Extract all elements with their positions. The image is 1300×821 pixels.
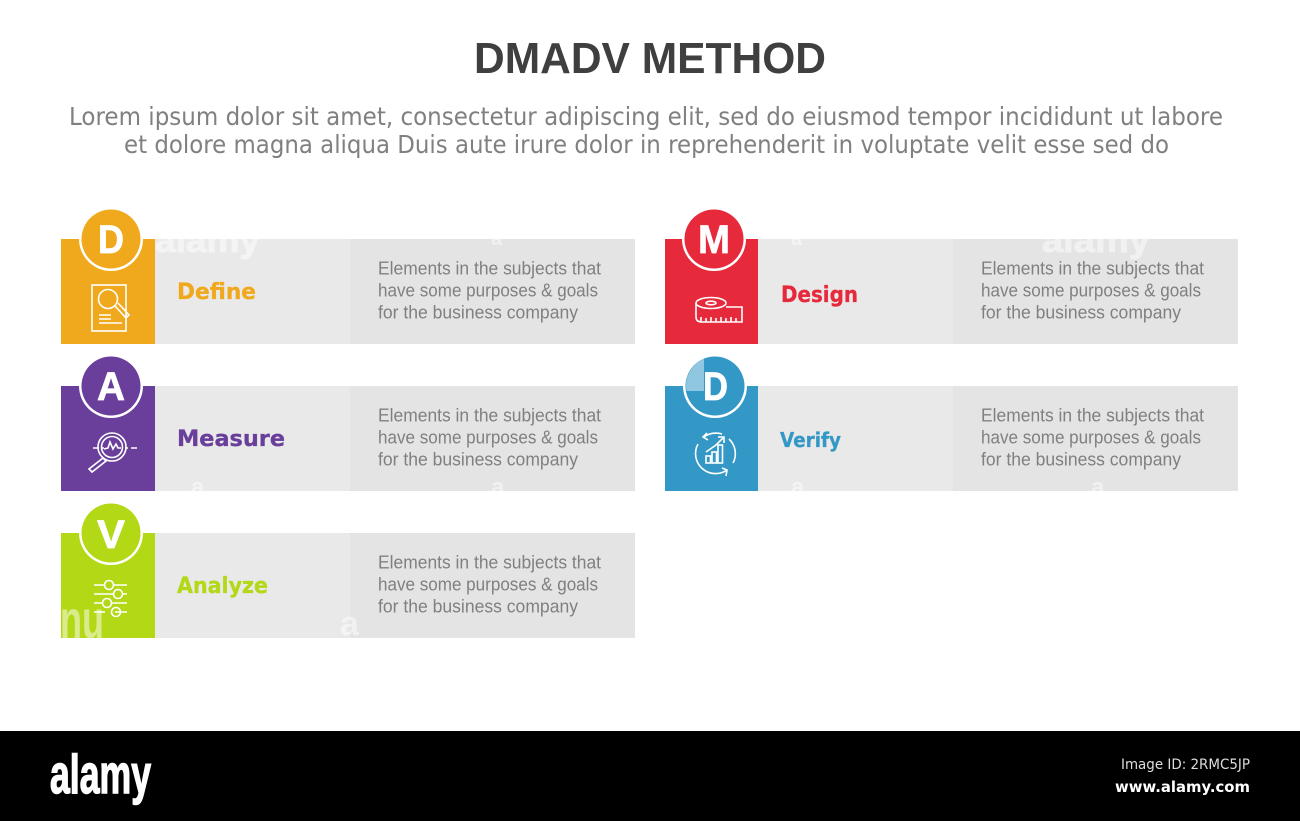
description: for the business company — [981, 302, 1182, 322]
badge: A: A — [97, 365, 125, 409]
badge: A — [79, 354, 143, 418]
badge: D — [79, 207, 143, 271]
watermark fragment: a — [340, 605, 360, 643]
watermark fragment: alamy — [155, 222, 260, 260]
description — [981, 404, 1204, 470]
watermark fragment: a — [491, 228, 503, 250]
description: have some purposes & goals — [378, 574, 598, 594]
icon: magnifier with chart — [89, 433, 137, 472]
description: for the business company — [378, 596, 579, 616]
panel: Design — [665, 207, 1238, 344]
footer logo: alamy — [50, 743, 151, 805]
watermark fragment: nu — [60, 590, 104, 650]
icon: document with magnifier — [92, 285, 129, 331]
description — [378, 404, 601, 470]
watermark fragment: a — [791, 228, 803, 250]
description — [981, 258, 1204, 322]
intro text: et dolore magna aliqua Duis aute irure dolor in reprehenderit in voluptate velit esse sed do — [124, 130, 1169, 159]
description — [378, 552, 601, 616]
watermark fragment: alamy — [1042, 222, 1150, 260]
badge: M — [682, 207, 746, 271]
label: Design: Design — [781, 283, 858, 308]
watermark fragment: a — [1091, 474, 1105, 501]
badge: V — [79, 501, 143, 565]
description: Elements in the subjects that — [981, 404, 1204, 426]
icon: sliders — [94, 580, 127, 616]
panel: Verify — [665, 354, 1238, 501]
description: for the business company — [378, 448, 579, 470]
intro text — [69, 102, 1223, 159]
description: have some purposes & goals — [981, 280, 1201, 300]
watermark fragment: a — [491, 474, 505, 501]
intro text: Lorem ipsum dolor sit amet, consectetur adipiscing elit, sed do eiusmod tempor incididunt ut labore — [69, 102, 1223, 131]
description: for the business company — [378, 302, 579, 322]
description — [378, 258, 601, 322]
icon: tape measure — [696, 298, 742, 322]
description: have some purposes & goals — [981, 426, 1201, 448]
footer bar — [0, 731, 1300, 821]
watermark fragment: a — [791, 474, 805, 501]
badge: D — [683, 354, 747, 418]
description: Elements in the subjects that — [378, 552, 601, 572]
label: Define: Define — [177, 280, 256, 305]
label: Verify: Verify — [780, 428, 841, 452]
description: Elements in the subjects that — [378, 258, 601, 278]
badge: V: V — [97, 513, 125, 557]
description: for the business company — [981, 448, 1182, 470]
description: Elements in the subjects that — [981, 258, 1204, 278]
icon: cycle with bar chart — [696, 433, 735, 476]
title: DMADV METHOD — [474, 35, 826, 83]
label: Measure: Measure — [177, 427, 285, 452]
description: have some purposes & goals — [378, 280, 598, 300]
watermark fragment: a — [191, 474, 205, 501]
description: have some purposes & goals — [378, 426, 598, 448]
image id: Image ID: 2RMC5JP — [1121, 757, 1250, 773]
label: Analyze: Analyze — [177, 574, 268, 599]
description: Elements in the subjects that — [378, 404, 601, 426]
site url: www.alamy.com — [1115, 778, 1250, 796]
panel: Analyze — [60, 501, 635, 650]
badge: D: D — [98, 218, 124, 262]
panel: Measure — [61, 354, 635, 501]
panel: Define — [61, 207, 635, 344]
badge: M: M — [698, 218, 730, 262]
badge: D: D — [703, 365, 728, 409]
